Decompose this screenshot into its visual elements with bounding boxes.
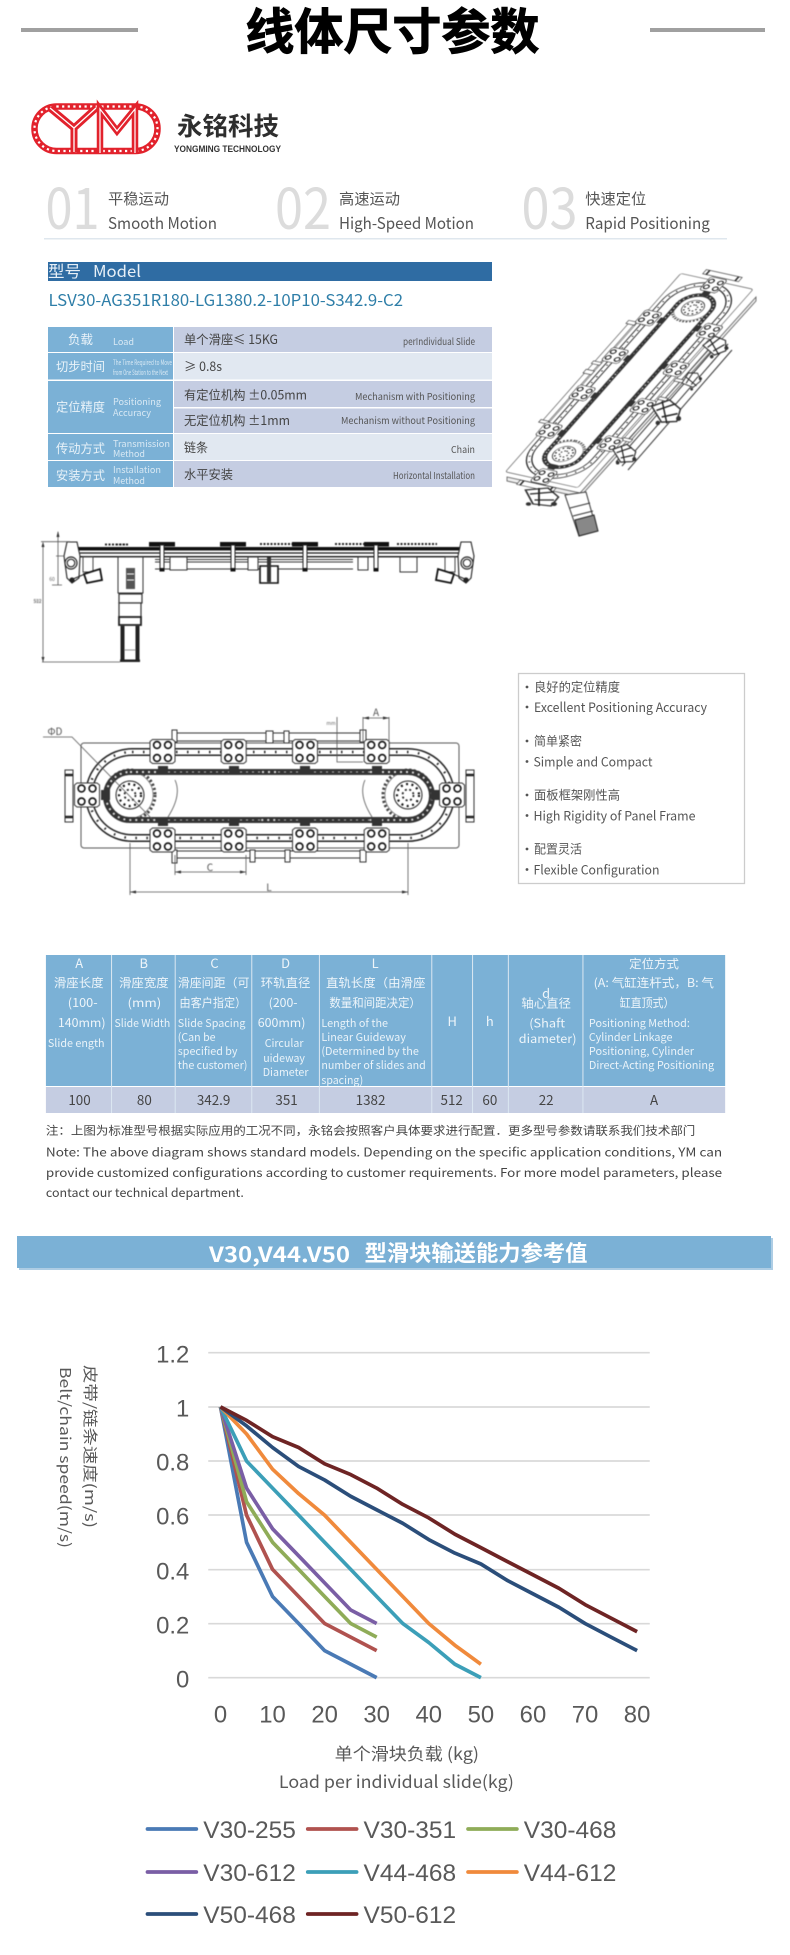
chart section banner [17,1236,773,1270]
column positioning method: Positioning, Cylinder [589,1043,695,1059]
column L: spacing) [321,1072,363,1088]
y axis ticks: 1.2 [156,1341,189,1368]
bullet: positioning accuracy [526,678,707,716]
x axis ticks: 40 [415,1702,442,1729]
slide rail assembly [64,542,474,583]
column A: 140mm) [58,1014,106,1031]
y axis ticks: 0.8 [156,1450,189,1477]
dimension lines: 512 [33,598,42,605]
row: step time: 切步时间 [56,356,105,375]
feature list box [518,674,744,884]
model heading bar [48,258,492,282]
dimension labels: mm [326,720,336,727]
column positioning method: Cylinder Linkage [589,1029,672,1045]
bullet: positioning accuracy: Excellent Positioning Accuracy [534,697,707,716]
row: transmission: Method [113,447,145,460]
row: step time: The Time Required to Move [113,358,172,368]
x axis ticks: 60 [520,1702,546,1729]
x axis ticks: 10 [259,1702,286,1729]
column d: 轴心直径 [521,994,571,1012]
row: positioning accuracy: 无定位机构 ±1mm [184,410,290,429]
column D: 环轨直径 [261,974,310,991]
dimension table [46,953,725,1113]
value row: 60 [482,1089,497,1109]
value row: 351 [275,1089,298,1109]
row: installation: 水平安装 [184,464,233,483]
dimension labels: A [373,704,380,719]
y axis title: Belt/chain speed(m/s) [55,1367,76,1548]
column H: H [447,1011,457,1030]
dimension lines [33,531,120,662]
row: transmission: 链条 [184,437,208,456]
column positioning method: Positioning Method: [589,1015,690,1031]
feature 01 [46,165,217,246]
bullet: flexible configuration: Flexible Configuration [534,860,660,878]
note text: 注：上图为标准型号根据实际应用的工况不同，永铭会按照客户具体要求进行配置．更多型号参数请联系我们技术部门 [46,1122,695,1139]
value row: 100 [68,1089,91,1109]
row: transmission: 传动方式 [56,438,105,457]
line chart [55,1341,650,1929]
feature strip [44,165,727,246]
column d [519,983,576,1047]
company name english: YONGMING TECHNOLOGY [174,144,282,155]
row: positioning accuracy: Mechanism without Positioning [341,413,476,427]
column L: Linear Guideway [321,1029,406,1045]
column C: the customer) [178,1057,247,1073]
column D: D [281,953,290,972]
column A: (100- [68,994,98,1011]
legend: V50-468 [203,1902,296,1929]
column L: (Determined by the [321,1043,419,1059]
row: load: 单个滑座≤ 15KG [184,329,278,348]
row: transmission: Transmission [113,437,170,450]
x axis ticks: 30 [363,1702,390,1729]
value row [68,1089,659,1109]
data series [220,1407,637,1678]
row: installation: Horizontal Installation [393,468,475,482]
column L: L [372,953,379,972]
chart section banner: V30,V44.V50 [208,1239,350,1269]
legend: V44-612 [524,1860,616,1887]
row: positioning accuracy: 有定位机构 ±0.05mm [184,384,307,404]
row: load: 负载 [68,329,93,348]
column D [258,953,310,1080]
y axis ticks: 1 [176,1396,189,1423]
column C: (Can be [178,1029,216,1045]
bullet: rigidity: High Rigidity of Panel Frame [534,806,696,824]
bullet: rigidity: 面板框架刚性高 [534,786,620,804]
spec table [48,327,492,487]
feature 02: High-Speed Motion [339,210,474,234]
legend: V30-468 [524,1817,616,1844]
feature 02: 02 [275,165,331,246]
y axis ticks [156,1341,189,1693]
column L: 数量和间距决定） [329,994,421,1011]
value row: 512 [440,1089,463,1109]
icon: YM chain emblem [34,106,158,153]
column positioning method: 缸直顶式） [620,994,674,1011]
column B: B [140,953,148,972]
row: installation: 安装方式 [56,465,105,484]
model heading bar: 型号 [48,258,81,282]
column d: diameter) [519,1030,576,1047]
legend [148,1817,616,1929]
bullet: simple and compact [526,732,653,770]
x axis title [279,1740,514,1793]
column A: A [75,953,83,972]
feature 01: 平稳运动 [108,188,169,209]
note text: Note: The above diagram shows standard models. Depending on the specific application conditions, YM can [46,1143,722,1161]
column B: Slide Width [115,1015,170,1031]
feature 01: Smooth Motion [108,210,217,234]
model heading bar: Model [93,258,141,282]
model code: LSV30-AG351R180-LG1380.2-10P10-S342.9-C2 [48,287,403,311]
plan view drawing [43,704,474,895]
y axis title: 皮带/链条速度(m/s) [80,1365,101,1528]
y axis ticks: 0.6 [156,1504,189,1531]
column C: Slide Spacing [178,1015,246,1031]
row: step time: from One Station to the Next [113,368,168,378]
dimension labels [43,704,408,895]
row: positioning accuracy: Accuracy [113,406,151,419]
x axis ticks: 80 [624,1702,650,1729]
legend: V30-255 [203,1817,296,1844]
row: load: Load [113,335,134,348]
column C: specified by [178,1043,238,1059]
column d: (Shaft [529,1014,566,1032]
row: installation: Method [113,474,145,487]
dimension labels: L [266,879,272,894]
y axis ticks: 0 [176,1666,189,1693]
title rule left [21,28,138,32]
column C: 滑座间距（可 [178,974,249,991]
row: transmission: Chain [451,442,475,456]
row: positioning accuracy: Mechanism with Positioning [355,389,476,403]
dimension labels: C [207,859,214,874]
column L: 直轨长度（由滑座 [326,974,425,991]
x axis ticks: 20 [311,1702,338,1729]
column positioning method: 定位方式 [629,955,679,972]
y axis title [55,1365,101,1548]
legend: V44-468 [364,1860,456,1887]
row: transmission [48,434,492,460]
motor [118,557,143,662]
feature 02: 高速运动 [339,188,400,209]
legend: V30-612 [203,1860,296,1887]
value row: 1382 [356,1089,385,1109]
cylinder rail and clamps [526,333,732,506]
bullet: flexible configuration: 配置灵活 [534,840,582,858]
feature 03: 快速定位 [585,188,646,209]
column A: 滑座长度 [54,974,104,991]
column C: 由客户指定） [180,994,246,1011]
logo [34,106,282,155]
x axis ticks [214,1702,650,1729]
column positioning method [589,955,715,1073]
note text [46,1122,723,1201]
row: positioning accuracy: 定位精度 [56,396,105,416]
value row: 80 [137,1089,152,1109]
dimension lines: 60 [49,576,55,583]
column L: Length of the [321,1015,388,1031]
column L: number of slides and [321,1057,426,1073]
column A [48,953,106,1051]
x axis title: 单个滑块负载 (kg) [335,1740,479,1765]
column D: uideway [263,1050,305,1066]
row: installation: Installation [113,463,161,476]
column B: 滑座宽度 [119,974,169,991]
feature 01: 01 [46,165,100,246]
bullet: flexible configuration [526,840,660,878]
x axis ticks: 50 [468,1702,494,1729]
column C: C [210,953,219,972]
value row: 22 [539,1089,554,1109]
x axis ticks: 70 [572,1702,598,1729]
chart section banner: 型滑块输送能力参考值 [364,1236,588,1268]
feature 03 [522,165,710,246]
column h: h [486,1011,494,1030]
feature 03: Rapid Positioning [585,210,710,234]
row: step time [48,353,492,380]
column B [115,953,170,1031]
value row: 342.9 [197,1089,230,1109]
bullet: simple and compact: Simple and Compact [534,752,653,770]
dimension labels: ΦD [48,723,63,738]
column D: Circular [265,1035,304,1051]
table value row background [46,1087,725,1113]
column positioning method: Direct-Acting Positioning [589,1057,715,1073]
row: step time: ≥ 0.8s [184,356,222,375]
column positioning method: (A: 气缸连杆式，B: 气 [594,974,714,991]
legend: V30-351 [364,1817,456,1844]
x axis ticks: 0 [214,1702,227,1729]
bullet: simple and compact: 简单紧密 [534,732,582,750]
side elevation drawing [33,531,474,662]
value row: A [650,1089,659,1109]
title [21,0,765,64]
bullet: rigidity [526,786,696,824]
column d: d [542,983,550,1002]
feature 02 [275,165,474,246]
column A: Slide ength [48,1035,105,1051]
feature 03: 03 [522,165,578,246]
column B: (mm) [127,994,161,1011]
column D: (200- [269,994,298,1011]
row: load [48,327,492,352]
isometric line drawing of conveyor [489,264,770,536]
column C [178,953,249,1073]
row: load: perIndividual Slide [403,334,475,348]
bullet: positioning accuracy: 良好的定位精度 [534,678,620,696]
column D: 600mm) [258,1014,305,1031]
column D: Diameter [263,1064,309,1080]
title rule right [650,28,765,32]
column L [321,953,426,1088]
y axis ticks: 0.4 [156,1558,189,1585]
note text: contact our technical department. [46,1184,244,1201]
note text: provide customized configurations according to customer requirements. For more model parameters, please [46,1164,723,1181]
company name: 永铭科技 [177,107,279,143]
row: positioning accuracy: Positioning [113,395,161,408]
table header background [46,955,725,1086]
legend: V50-612 [364,1902,456,1929]
icon: motor [565,492,598,536]
x axis title: Load per individual slide(kg) [279,1768,514,1793]
y axis ticks: 0.2 [156,1612,189,1639]
row: installation [48,461,492,487]
row: positioning accuracy [48,381,492,433]
